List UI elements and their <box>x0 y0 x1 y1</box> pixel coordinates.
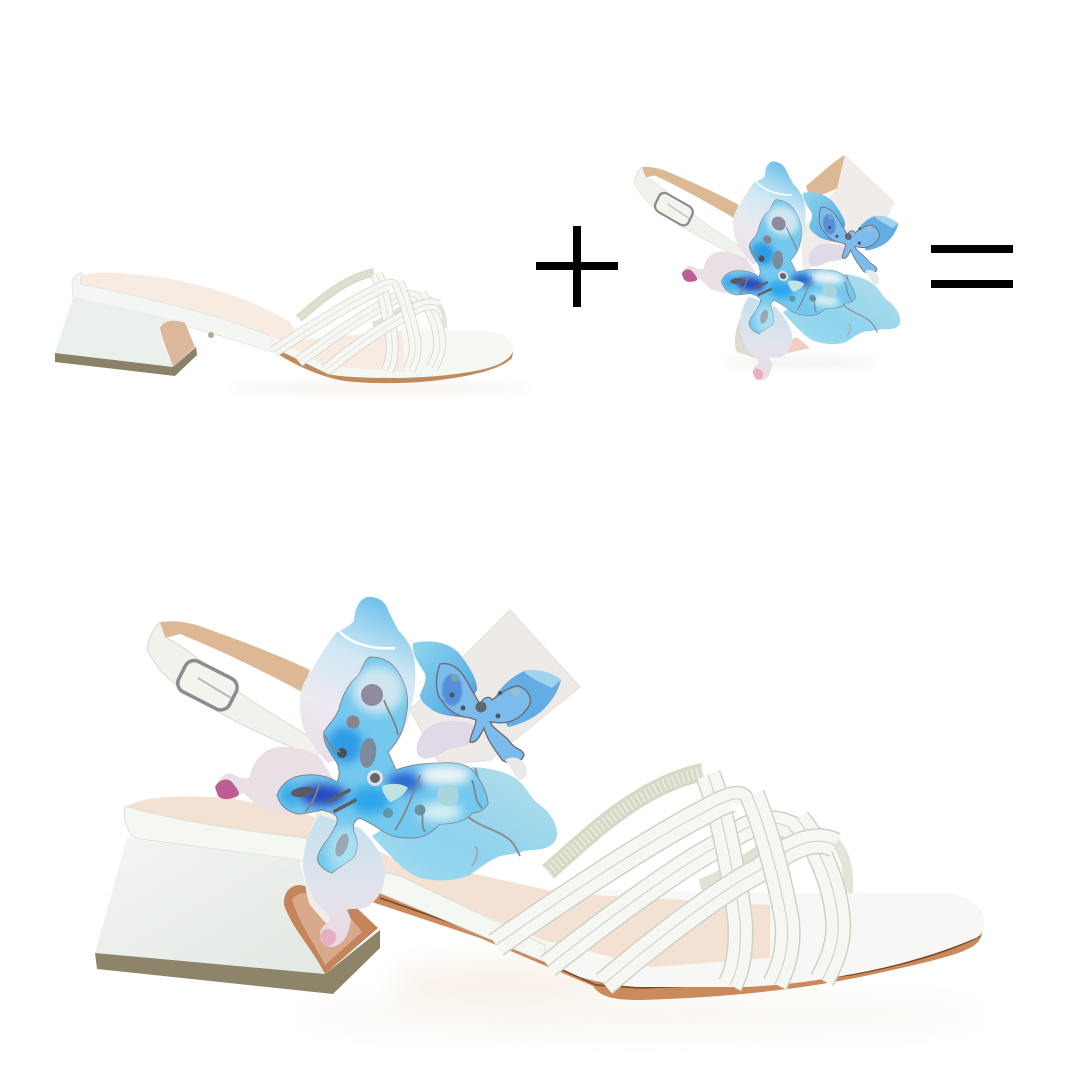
accessory shadow <box>720 357 880 367</box>
toe platform <box>272 330 513 378</box>
heel sole <box>95 930 380 994</box>
woven straps large <box>496 772 848 985</box>
plus sign <box>536 226 618 307</box>
heel rim <box>72 272 285 352</box>
grey heel strip <box>735 318 755 358</box>
butterfly upper <box>147 597 561 947</box>
heel rim <box>124 806 545 962</box>
top-left slide sandal <box>55 272 530 393</box>
ground shadow <box>230 383 530 393</box>
pink insole piece <box>775 337 810 356</box>
small composition <box>633 150 906 392</box>
outsole <box>372 890 982 1000</box>
ground shadow <box>300 999 980 1031</box>
heel sole <box>55 347 197 376</box>
heel inner tan <box>160 321 195 367</box>
woven straps small <box>273 272 445 370</box>
top-right butterfly accessory <box>633 150 906 392</box>
flap behind butterfly <box>410 610 580 765</box>
toe platform <box>480 890 984 987</box>
assembled sandal with butterfly <box>95 597 984 1031</box>
white heel strap behind tail <box>305 810 345 928</box>
flap with lining <box>806 155 845 200</box>
outsole <box>185 322 513 383</box>
equals sign <box>931 245 1013 288</box>
heel block <box>95 838 325 974</box>
footbed beige <box>80 273 405 372</box>
heel block <box>55 297 185 367</box>
insole beige <box>125 796 770 967</box>
heel inner tan <box>284 885 378 974</box>
infographic canvas <box>55 155 1013 1030</box>
metal stud <box>208 332 214 338</box>
